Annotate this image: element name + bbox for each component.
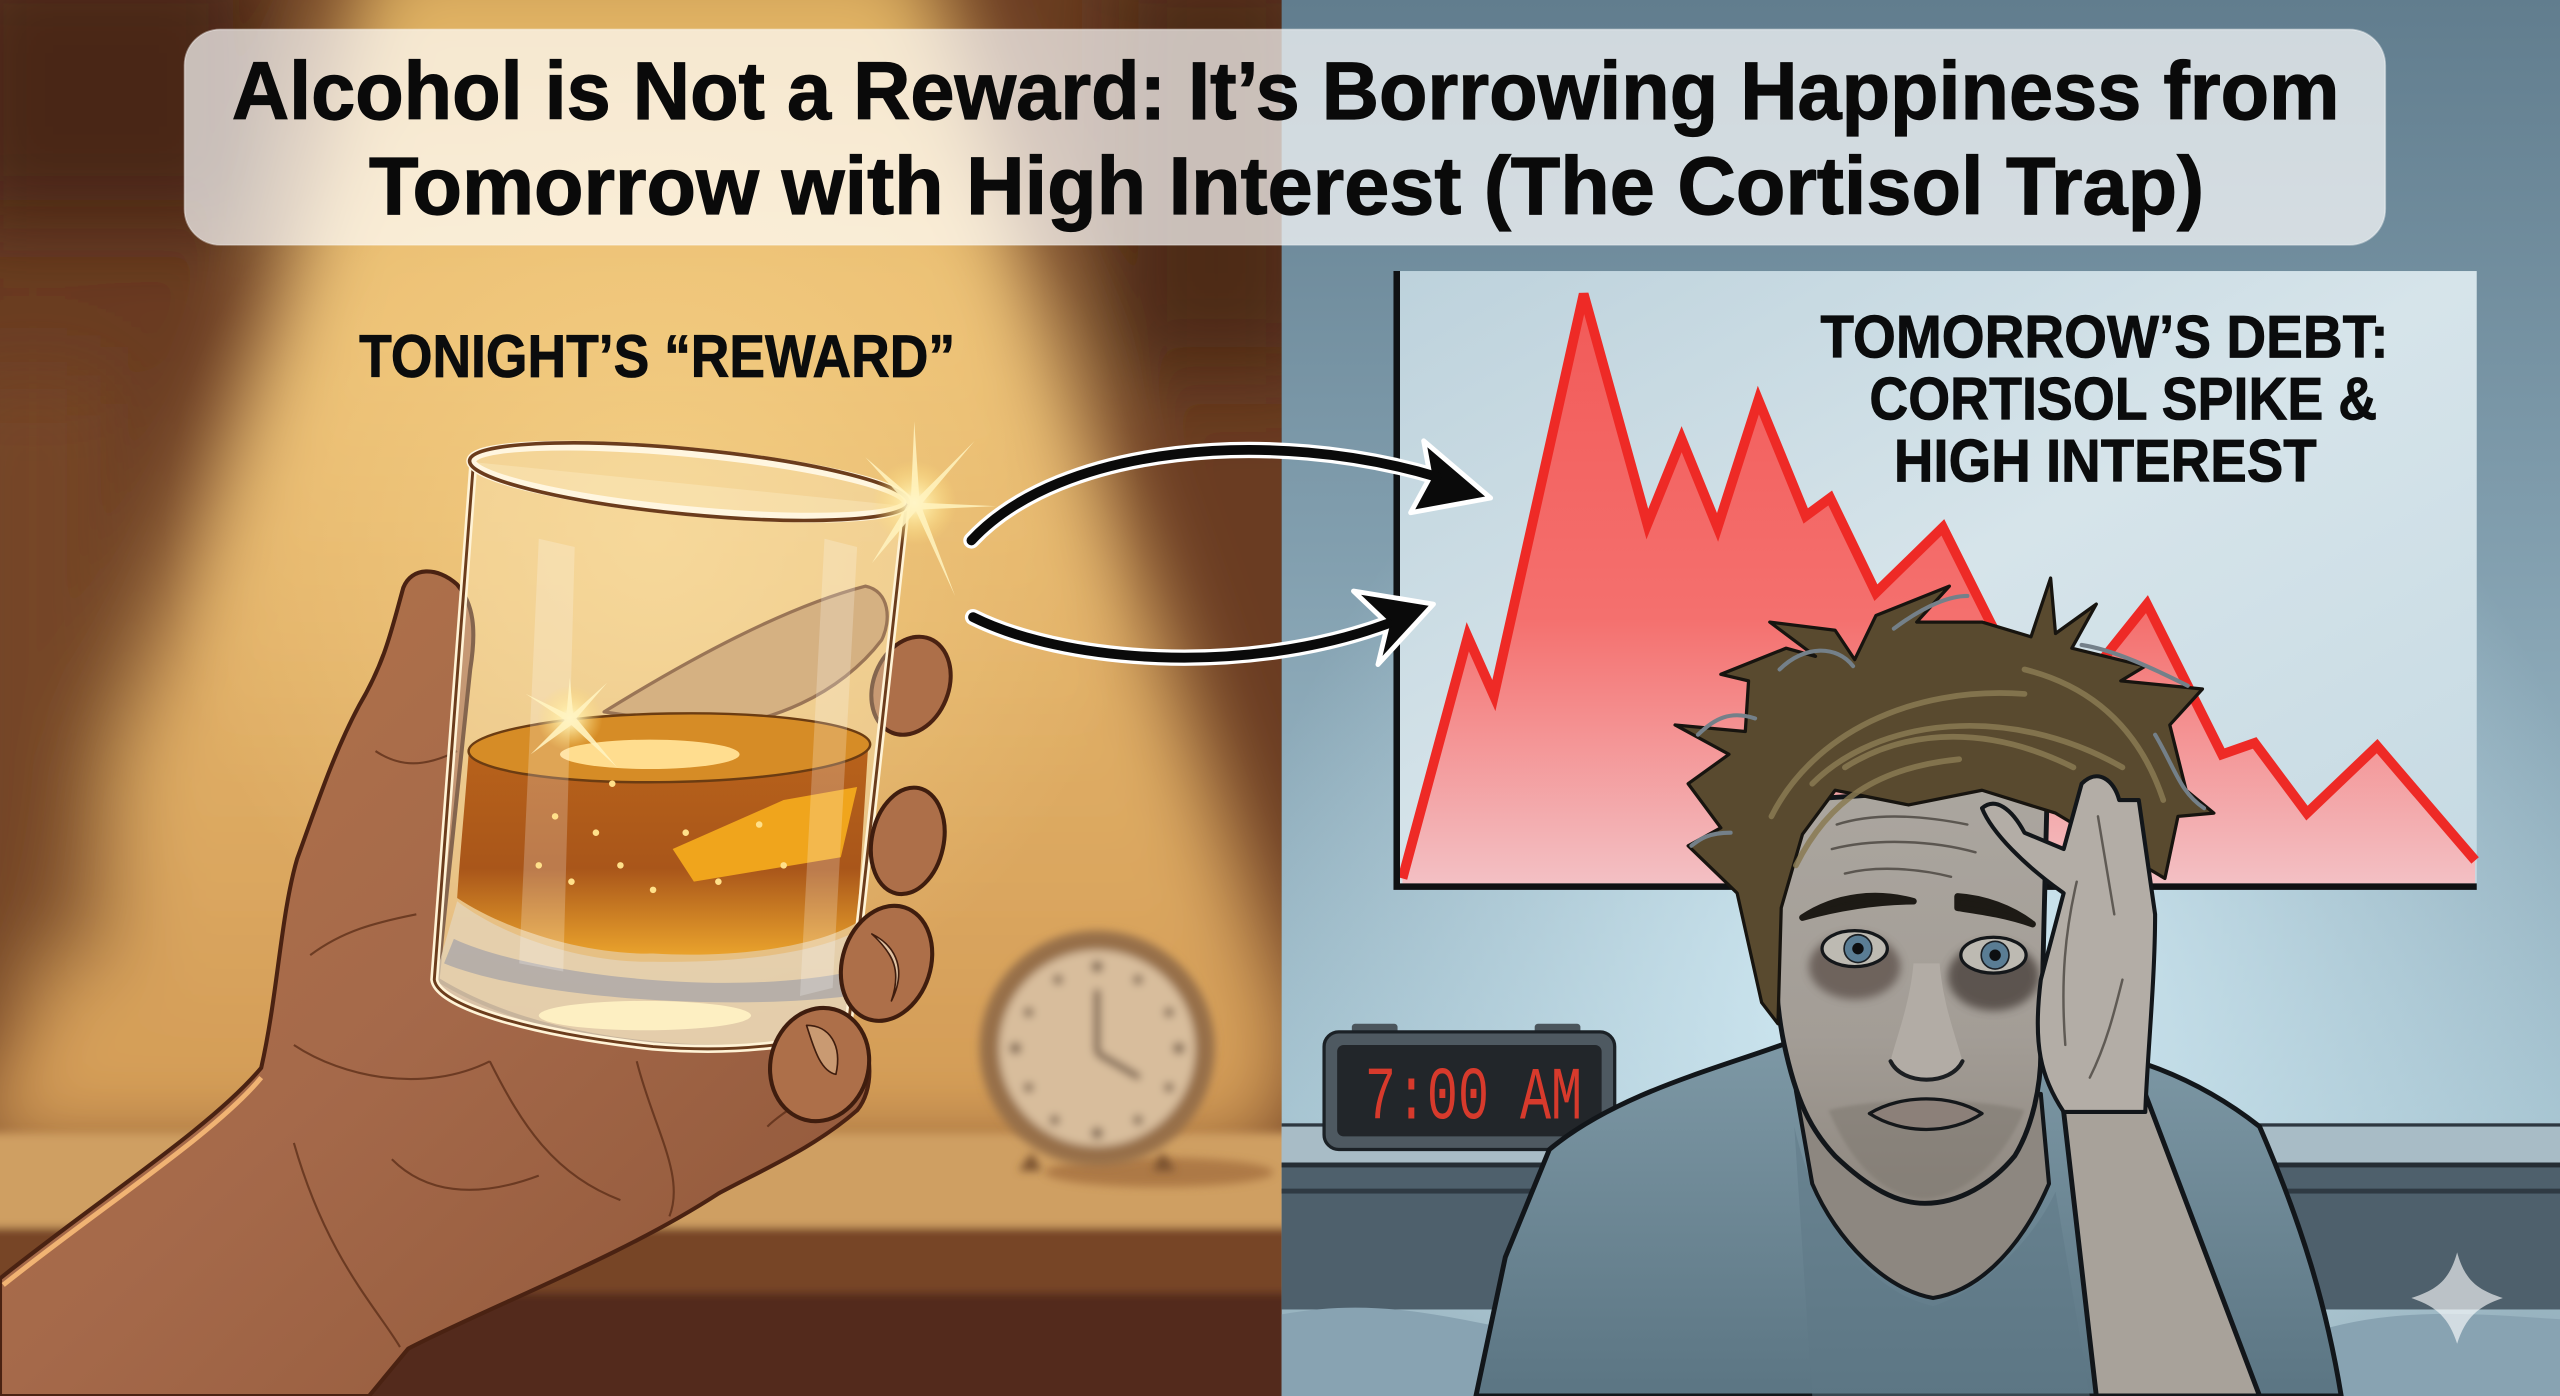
text: tomorrow's debt label: CORTISOL SPIKE &: [1869, 365, 2377, 433]
hand and arm: [0, 571, 869, 1396]
icon: alarm clock showing 7:00 AM: [1324, 1024, 1615, 1149]
text: tomorrow's debt label: TOMORROW’S DEBT:: [1820, 303, 2389, 371]
shirt: [1476, 1043, 2341, 1396]
hand creases: [294, 751, 857, 1347]
rim: [468, 431, 910, 532]
glass highlights: [519, 539, 857, 996]
glass base: [434, 901, 857, 1049]
hand on head: [1982, 776, 2155, 1112]
forehead lines: [1832, 816, 1976, 877]
tabletop: [0, 1133, 1290, 1396]
hair grey strands: [1691, 596, 2204, 846]
bubbles: [536, 780, 787, 893]
stubble: [1829, 1100, 2024, 1198]
mouth: [1869, 1099, 1982, 1129]
nose: [1891, 963, 1962, 1080]
glass body: [434, 462, 906, 1049]
text: tonight's reward label: TONIGHT’S “REWARD”: [359, 322, 955, 390]
panel: tonight background: [0, 0, 1322, 1396]
area chart: [1402, 294, 2475, 883]
arrow: lower curved arrow: [973, 591, 1433, 665]
arm: [2064, 1094, 2260, 1396]
hair highlights: [1771, 669, 2163, 865]
ice cube: [673, 787, 857, 882]
clock digits: 7:00 AM: [1365, 1055, 1582, 1141]
panel: title banner: [184, 29, 2385, 245]
glass sides: [434, 462, 906, 1049]
icon: watermark sparkle: [2411, 1252, 2503, 1344]
text: tomorrow's debt label: HIGH INTEREST: [1894, 427, 2317, 495]
title: Alcohol is Not a Reward: It’s Borrowing Happiness from: [232, 46, 2340, 137]
eye bags: [1809, 934, 1900, 999]
neck: [1796, 1091, 2049, 1298]
finger behind glass: [604, 586, 887, 727]
chart axes: [1397, 271, 2477, 887]
icon: hand holding glass: [0, 428, 965, 1396]
eyebrows: [1802, 896, 2033, 924]
icon: glass sparkles: [526, 421, 996, 767]
title: Tomorrow with High Interest (The Cortisol Trap): [369, 141, 2204, 232]
panel: tomorrow background: [1282, 0, 2560, 1396]
bar chart: cortisol spike: [1397, 271, 2477, 887]
whisky: [457, 740, 869, 955]
icon: exhausted man: [1476, 578, 2341, 1396]
fingers: [861, 781, 954, 901]
icon: blurred wall clock: [980, 931, 1215, 1171]
face: [1776, 784, 2047, 1203]
arrow: upper curved arrow: [971, 441, 1491, 540]
trend line: [1402, 294, 2475, 878]
text: tomorrow's debt label: [1820, 303, 2389, 495]
title: [232, 46, 2340, 232]
hair mass: [1675, 578, 2214, 1024]
eyes: [1822, 931, 1887, 967]
